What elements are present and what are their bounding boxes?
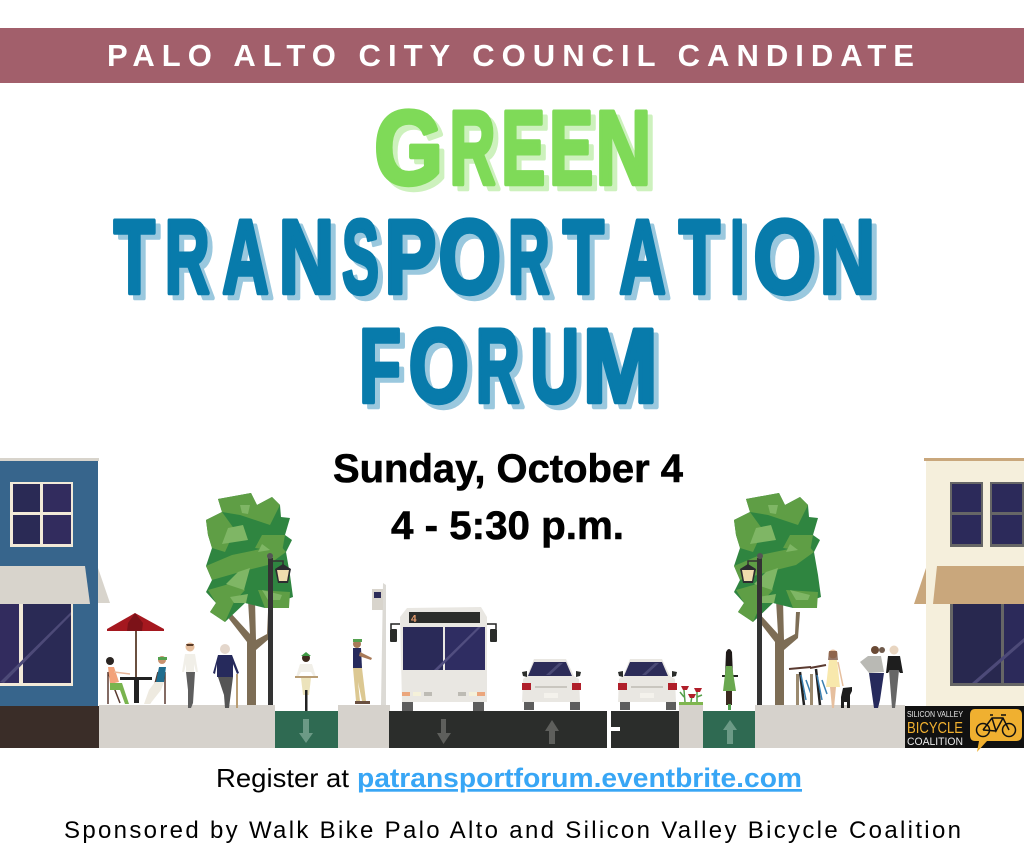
title: TRANSPORTATION: T	[114, 199, 155, 316]
top banner	[0, 28, 1024, 83]
car two	[618, 659, 677, 710]
cafe table with umbrella and two diners	[106, 613, 167, 704]
tree left	[206, 493, 293, 705]
registration line: patransportforum.eventbrite.com	[357, 763, 802, 793]
title: GREEN: G	[374, 90, 443, 207]
title: TRANSPORTATION: A	[619, 199, 666, 316]
title: TRANSPORTATION	[114, 199, 880, 321]
tree right	[734, 493, 821, 705]
title: TRANSPORTATION: A	[222, 199, 269, 316]
title: TRANSPORTATION: R	[170, 204, 215, 321]
registration line: Register at	[216, 763, 350, 793]
title: TRANSPORTATION: R	[513, 204, 555, 321]
title: FORUM: U	[530, 308, 579, 425]
sidewalks and bike lanes	[99, 705, 905, 748]
planter with flowers	[679, 686, 703, 705]
street illustration	[0, 458, 1024, 752]
title: TRANSPORTATION: P	[390, 204, 441, 321]
title: FORUM: R	[476, 308, 520, 425]
banner heading: PALO ALTO CITY COUNCIL CANDIDATE	[107, 38, 914, 73]
title: FORUM: F	[359, 308, 401, 425]
title: TRANSPORTATION: A	[227, 204, 274, 321]
title: GREEN: E	[549, 90, 593, 207]
car one	[522, 659, 581, 710]
pedestrian woman walking	[182, 642, 198, 708]
sponsors line: Sponsored by Walk Bike Palo Alto and Silicon Valley Bicycle Coalition	[64, 817, 961, 844]
title: GREEN: E	[506, 95, 550, 212]
title: FORUM: M	[588, 313, 663, 430]
title: FORUM: O	[409, 308, 469, 425]
title: TRANSPORTATION: T	[119, 204, 160, 321]
logo: Silicon Valley Bicycle Coalition: SILICON VALLEY	[907, 710, 964, 719]
logo: Silicon Valley Bicycle Coalition: COALITION	[907, 736, 963, 748]
title: TRANSPORTATION: P	[384, 199, 436, 316]
street lamp right	[740, 553, 763, 705]
right cream building	[914, 458, 1024, 706]
title: GREEN: R	[454, 95, 500, 212]
woman in yellow dress walking dog	[826, 650, 843, 708]
dog	[841, 687, 852, 708]
title: TRANSPORTATION: O	[758, 204, 821, 321]
title: FORUM: M	[583, 308, 658, 425]
title: TRANSPORTATION: O	[753, 199, 816, 316]
title: TRANSPORTATION: R	[508, 199, 550, 316]
road	[389, 711, 679, 748]
title: TRANSPORTATION: T	[684, 204, 725, 321]
title: TRANSPORTATION: N	[820, 199, 875, 316]
title: TRANSPORTATION: N	[279, 199, 334, 316]
logo: Silicon Valley Bicycle Coalition: BICYCLE	[907, 720, 963, 737]
bus	[390, 607, 497, 711]
parked bicycles	[789, 665, 827, 705]
event time: 4 - 5:30 p.m.	[391, 504, 624, 548]
title: TRANSPORTATION: S	[342, 199, 379, 316]
title: TRANSPORTATION: T	[568, 204, 609, 321]
title: FORUM: R	[481, 313, 525, 430]
bus: 4	[411, 614, 417, 625]
title: TRANSPORTATION: R	[165, 199, 210, 316]
event date: Sunday, October 4	[333, 447, 684, 491]
title: TRANSPORTATION: S	[347, 204, 384, 321]
title: TRANSPORTATION: O	[438, 199, 501, 316]
icon: bicycle speech bubble	[970, 709, 1022, 752]
title: GREEN: E	[501, 90, 545, 207]
title: FORUM	[359, 308, 663, 430]
title: GREEN: E	[554, 95, 598, 212]
bus stop pole and sign	[372, 583, 386, 705]
woman on bike seen from behind	[722, 649, 738, 710]
title: TRANSPORTATION: O	[443, 204, 506, 321]
logo: Silicon Valley Bicycle Coalition	[905, 706, 1024, 752]
title: TRANSPORTATION: A	[624, 204, 671, 321]
title: GREEN: G	[379, 95, 448, 212]
title: FORUM: O	[414, 313, 474, 430]
title: TRANSPORTATION: I	[735, 204, 749, 321]
title: GREEN: R	[450, 90, 496, 207]
title: TRANSPORTATION: T	[679, 199, 720, 316]
title: GREEN: N	[601, 95, 656, 212]
elderly pedestrian with cane	[213, 644, 239, 708]
title: TRANSPORTATION: T	[563, 199, 604, 316]
title: GREEN	[374, 90, 656, 212]
title: GREEN: N	[596, 90, 651, 207]
title: TRANSPORTATION: N	[825, 204, 880, 321]
title: FORUM: F	[364, 313, 406, 430]
title: TRANSPORTATION: N	[284, 204, 339, 321]
left blue building	[0, 458, 110, 748]
street lamp left	[267, 553, 291, 705]
cyclist in bike lane	[295, 652, 318, 711]
couple walking	[860, 646, 903, 708]
title: FORUM: U	[535, 313, 584, 430]
man with phone at bus stop	[353, 639, 372, 704]
title: TRANSPORTATION: I	[730, 199, 744, 316]
